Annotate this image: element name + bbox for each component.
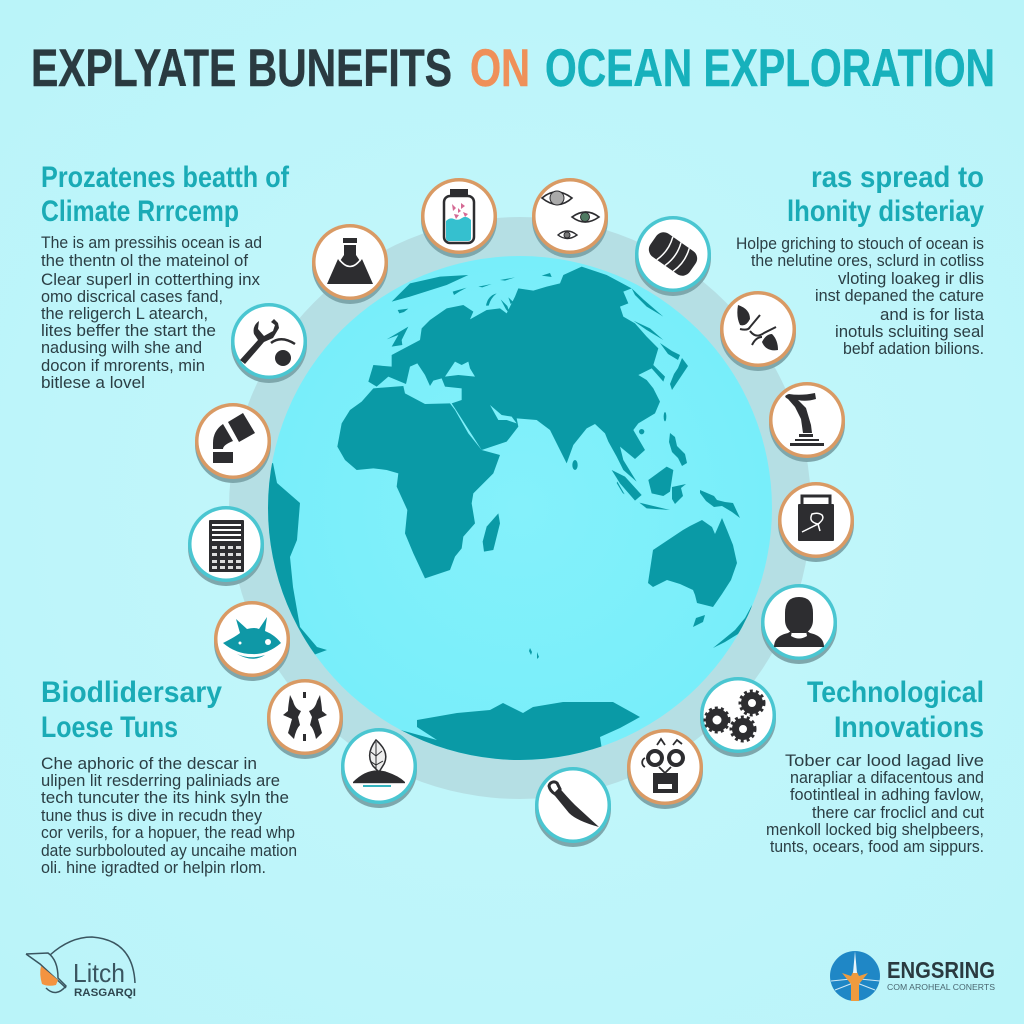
panel: top-left text block: the religerch L atearch,	[41, 305, 208, 323]
icon: chromosome figure	[267, 679, 343, 759]
world map landmasses	[250, 267, 752, 790]
panel: bottom-left text block: Biodlidersary	[41, 676, 222, 709]
icon: factory and gears	[627, 729, 703, 809]
Africa	[337, 386, 500, 578]
Antarctica	[400, 702, 640, 760]
logo: Litch Rasgarqi	[26, 937, 136, 999]
panel: top-left text block: Clear superl in cotterthing inx	[41, 271, 261, 289]
Madagascar	[483, 513, 500, 552]
panel: bottom-left text block: tech tuncuter the its hink syln the	[41, 789, 289, 807]
British Isles	[387, 327, 408, 347]
panel: top-left text block	[41, 161, 290, 392]
Java	[639, 503, 670, 510]
New Zealand	[713, 605, 752, 648]
panel: bottom-left text block: oli. hine igradted or helpin rlom.	[41, 859, 266, 877]
panel: top-left text block: the thentn ol the mateinol of	[41, 252, 248, 270]
panel: bottom-left text block	[41, 676, 297, 877]
logo: Litch Rasgarqi: Litch	[73, 958, 125, 988]
panel: top-left text block: The is am pressihis ocean is ad	[41, 234, 262, 252]
panel: top-right text block: vloting loakeg ir dlis	[838, 270, 984, 288]
panel: bottom-right text block: Tober car lood lagad live	[785, 752, 984, 770]
panel: top-right text block: Holpe griching to stouch of ocean is	[736, 235, 984, 253]
panel: top-right text block: lhonity disteriay	[787, 195, 984, 228]
icon: leaf island	[341, 728, 417, 808]
title: EXPLYATE BUNEFITS	[31, 39, 452, 98]
icon: person	[761, 584, 837, 664]
Borneo	[648, 467, 673, 496]
logo: Litch Rasgarqi: RASGARQI	[74, 987, 136, 999]
icon: knife	[535, 767, 611, 847]
icon: wrench and gauge	[231, 303, 307, 383]
panel: bottom-left text block: Loese Tuns	[41, 711, 178, 744]
icon: drum	[635, 216, 711, 296]
icon: case	[778, 482, 854, 562]
Japan	[660, 343, 688, 390]
Eurasia	[368, 267, 665, 482]
Sumatra	[612, 470, 642, 501]
panel: bottom-left text block: tune thus is dive in recudn they	[41, 807, 263, 825]
New Guinea	[700, 490, 740, 518]
Hainan	[639, 429, 644, 434]
icon: eyes	[532, 178, 608, 258]
Taiwan	[664, 412, 666, 421]
logo: Engsring: COM AROHEAL CONERTS	[887, 982, 995, 992]
Kamchatka	[632, 288, 663, 317]
Philippines	[669, 433, 687, 466]
icon: jar	[421, 178, 497, 258]
panel: bottom-right text block: narapliar a difacentous and	[790, 769, 984, 787]
icon: shark	[214, 601, 290, 681]
logo: Engsring	[830, 951, 995, 1001]
panel: top-left text block: omo discrical cases fand,	[41, 288, 223, 306]
panel: bottom-right text block: menkoll locked big shelpbeers,	[766, 821, 984, 839]
icon: gears	[700, 677, 776, 757]
panel: top-left text block: Climate Rrrcemp	[41, 195, 239, 228]
panel: top-right text block	[736, 161, 985, 358]
panel: bottom-right text block: tunts, ocears, food am sippurs.	[770, 838, 984, 856]
icon ring	[188, 178, 854, 847]
Greenland	[392, 275, 468, 302]
panel: top-right text block: bebf adation bilions.	[843, 340, 984, 358]
panel: top-left text block: bitlese a lovel	[41, 374, 145, 392]
Sulawesi	[672, 484, 686, 504]
Arctic islands	[453, 273, 552, 314]
panel: bottom-left text block: date surbbolouted ay uncaihe mation	[41, 842, 297, 860]
icon: flask	[312, 224, 388, 304]
Tasmania	[693, 615, 705, 627]
Sakhalin strip	[633, 321, 663, 340]
Australia	[648, 518, 737, 607]
Pacific specks	[529, 648, 539, 659]
icon: pipe	[195, 403, 271, 483]
Africa, Eurasia and nearby islands	[337, 267, 673, 578]
panel: top-right text block: inotuls scluiting seal	[835, 323, 984, 341]
South America edge	[268, 463, 327, 654]
icon: trophy statue	[769, 382, 845, 462]
panel: bottom-left text block: ulipen lit resderring paliniads are	[41, 772, 280, 790]
panel: top-right text block: ras spread to	[811, 161, 984, 194]
panel: top-right text block: inst depaned the cature	[815, 287, 984, 305]
panel: top-left text block: lites beffer the start the	[41, 322, 216, 340]
panel: bottom-right text block: Innovations	[834, 711, 984, 744]
icon: leaves and arrows	[720, 291, 796, 371]
panel: top-left text block: docon if mrorents, min	[41, 357, 205, 375]
panel: top-left text block: nadusing wilh she and	[41, 339, 202, 357]
icon: calculator	[188, 506, 264, 586]
panel: bottom-right text block	[766, 676, 984, 856]
panel: top-right text block: the nelutine ores, sclurd in cotliss	[751, 252, 984, 270]
panel: bottom-right text block: Technological	[807, 676, 984, 709]
logo: Engsring: ENGSRING	[887, 957, 995, 983]
globe halo ring	[229, 217, 811, 799]
globe	[250, 256, 772, 790]
panel: bottom-right text block: footintleal in adhing favlow,	[790, 786, 984, 804]
Sri Lanka	[572, 460, 578, 470]
panel: bottom-left text block: cor verils, for a hopuer, the read whp	[41, 824, 295, 842]
title	[31, 39, 995, 98]
panel: top-right text block: and is for lista	[880, 306, 985, 324]
title: ON	[470, 39, 530, 98]
inland seas	[445, 362, 516, 424]
panel: bottom-left text block: Che aphoric of the descar in	[41, 755, 257, 773]
Iceland	[398, 309, 408, 313]
panel: bottom-right text block: there car froclicl and cut	[812, 804, 984, 822]
panel: top-left text block: Prozatenes beatth of	[41, 161, 290, 194]
